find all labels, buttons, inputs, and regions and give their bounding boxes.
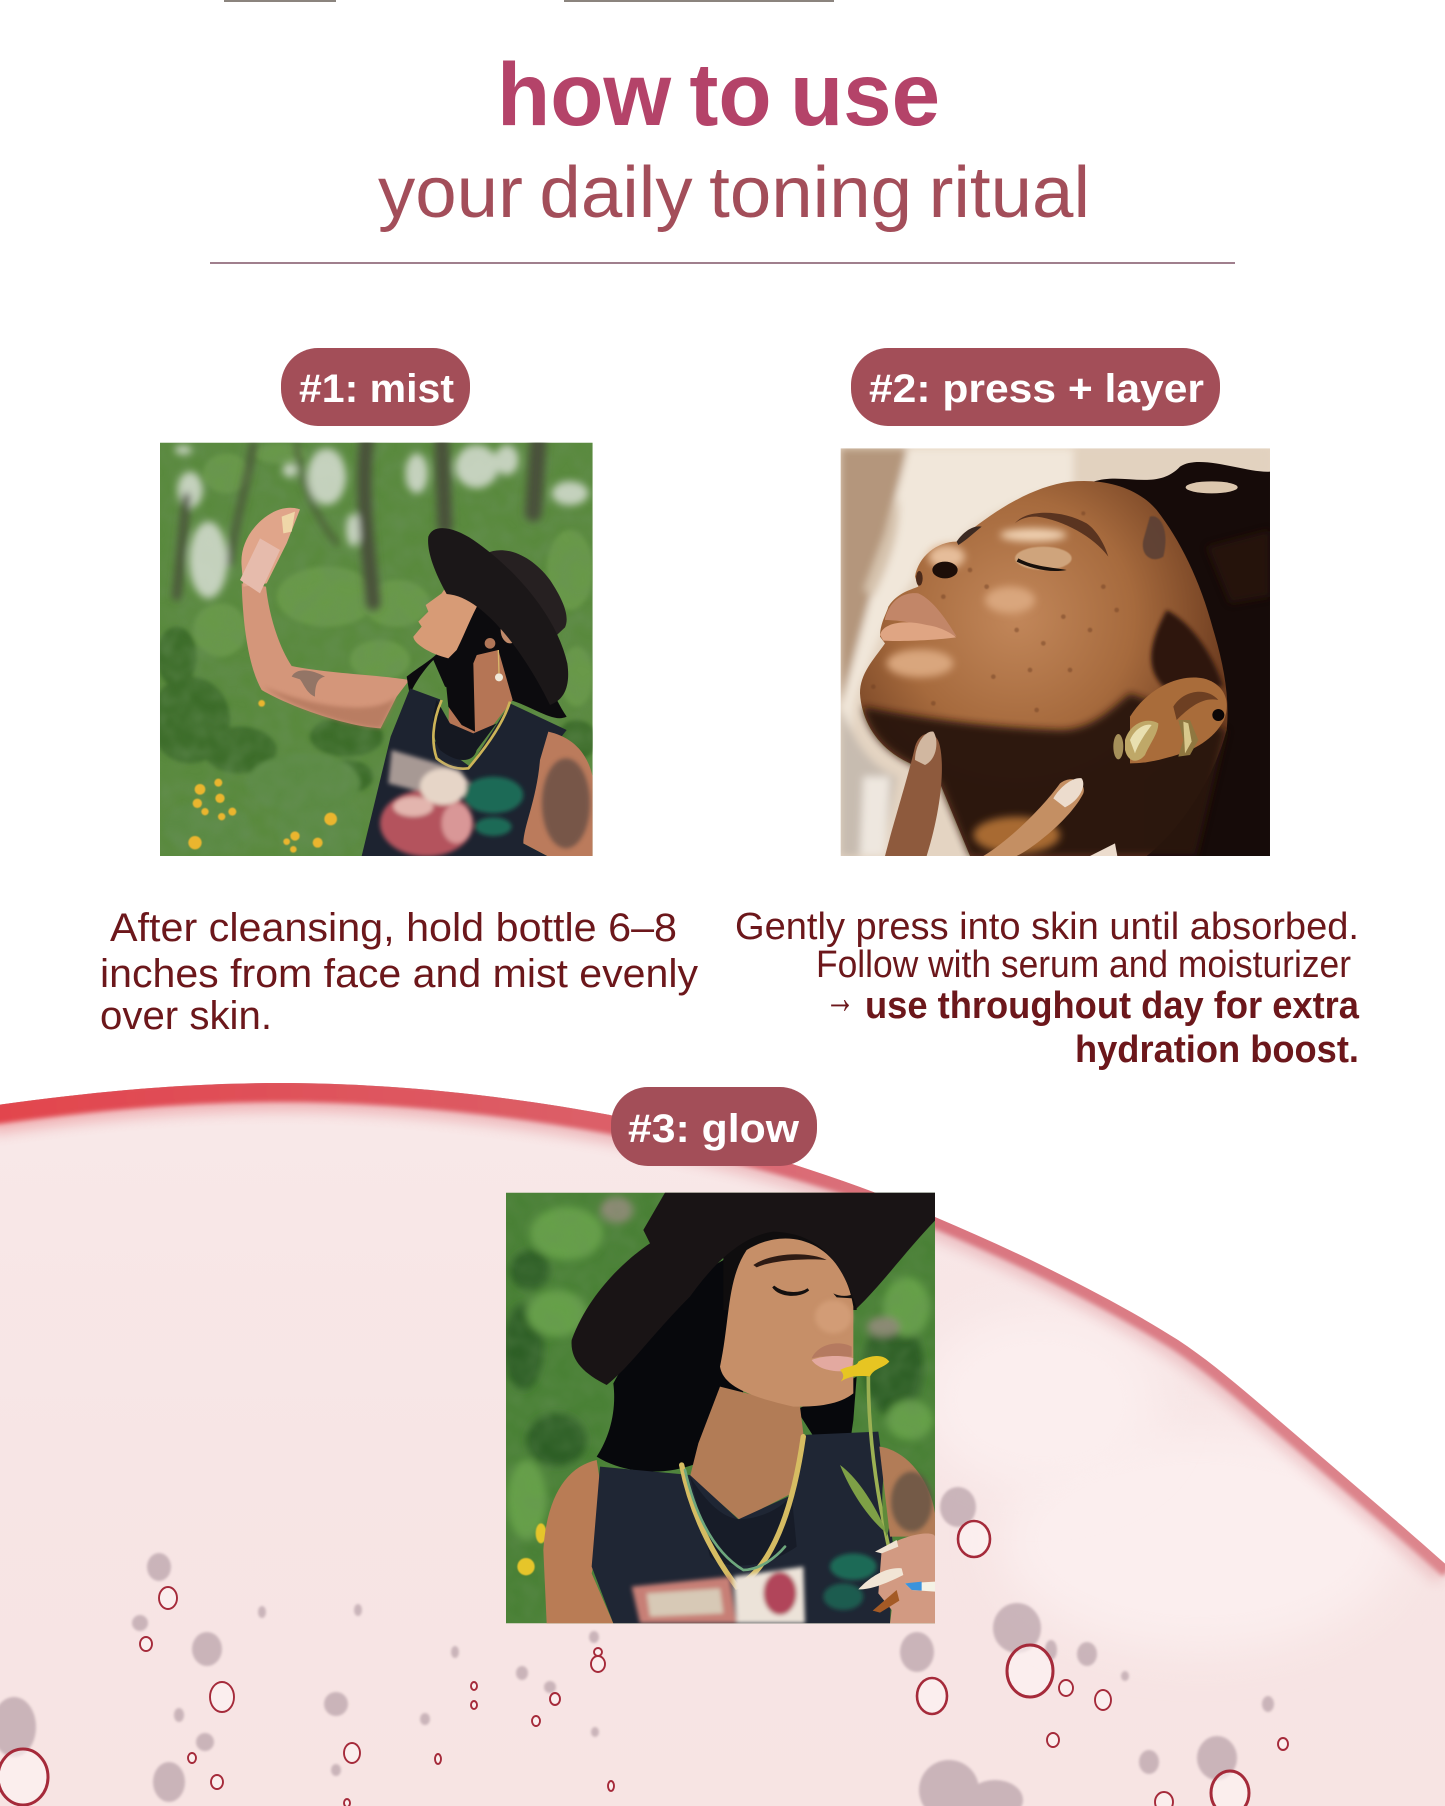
arm tattoo [292, 670, 325, 697]
yellow background flowers [517, 1523, 546, 1575]
step 2 pill [851, 348, 1220, 426]
step 2 pill: #2: press + layer [869, 367, 1204, 411]
gold necklaces [682, 1437, 803, 1587]
right arm with tattoo [879, 1447, 935, 1537]
tank top [362, 688, 567, 856]
raised arm [242, 583, 409, 728]
hand with long nails [858, 1533, 935, 1623]
face [860, 481, 1228, 856]
step 2 body text: hydration boost. [1075, 1029, 1359, 1071]
step 2 body text: use throughout day for extra [865, 985, 1360, 1027]
ring bubbles [0, 1521, 1288, 1806]
step 3 pill: #3: glow [628, 1107, 800, 1151]
step 1 pill: #1: mist [299, 367, 454, 411]
neck [690, 1387, 805, 1520]
subtitle: your daily toning ritual [378, 153, 1090, 233]
skin highlights [887, 528, 1067, 677]
step 2 body text: Follow with serum and moisturizer [816, 944, 1351, 986]
lips [880, 593, 957, 641]
hand holding bottle [240, 508, 300, 593]
fingers [885, 732, 1117, 856]
facial features [753, 1254, 855, 1371]
step 1 body text: inches from face and mist evenly [100, 952, 698, 996]
step 3 pill [611, 1087, 817, 1166]
left shoulder [543, 1460, 613, 1623]
neck and chest [448, 650, 513, 734]
title: how to use [497, 44, 940, 144]
navy tank top [592, 1432, 893, 1623]
step 1 body text: After cleansing, hold bottle 6–8 [110, 906, 677, 950]
sky patches and trunks [175, 440, 588, 603]
photo: close-up of glowing freckled face [841, 448, 1270, 856]
tee print [380, 750, 523, 857]
foliage masses [160, 442, 593, 791]
hat [572, 1193, 935, 1385]
header divider [210, 262, 1235, 264]
flower stem and leaves [840, 1377, 892, 1560]
nose [916, 562, 958, 586]
step 1 body text [100, 906, 698, 1038]
hair [597, 1253, 743, 1472]
flowers [188, 700, 337, 853]
far arm with tattoo [523, 732, 593, 856]
photo: woman misting face outdoors [150, 440, 597, 857]
step 2 body text [735, 906, 1360, 1071]
photo: woman smelling yellow flower [503, 1193, 935, 1623]
gold earrings [1113, 720, 1198, 761]
hair [406, 619, 567, 718]
dark hat underside behind face [723, 1223, 857, 1310]
face [413, 590, 477, 658]
step 1 body text: over skin. [100, 994, 272, 1038]
falling hair strands [446, 655, 477, 732]
curtain background [840, 448, 1074, 856]
yellow flower [840, 1356, 889, 1382]
necklace [433, 700, 510, 769]
background: pink toner gel droplet [0, 1083, 1445, 1806]
face [720, 1238, 853, 1407]
jaw and neck shadow [863, 693, 1227, 856]
ear and earring [484, 628, 512, 682]
brow and closed eye [957, 513, 1108, 571]
freckles [871, 511, 1119, 712]
tee print [632, 1553, 877, 1623]
hat [428, 528, 568, 705]
ear [1130, 677, 1227, 763]
hair [1094, 462, 1270, 856]
step 1 pill [281, 348, 470, 426]
blurred shadow dots [0, 1487, 1274, 1806]
step 2 body text: → [825, 971, 855, 1023]
top edge slivers from previous panel [224, 0, 834, 2]
step 2 body text: Gently press into skin until absorbed. [735, 906, 1359, 948]
blurred green background [503, 1197, 933, 1540]
